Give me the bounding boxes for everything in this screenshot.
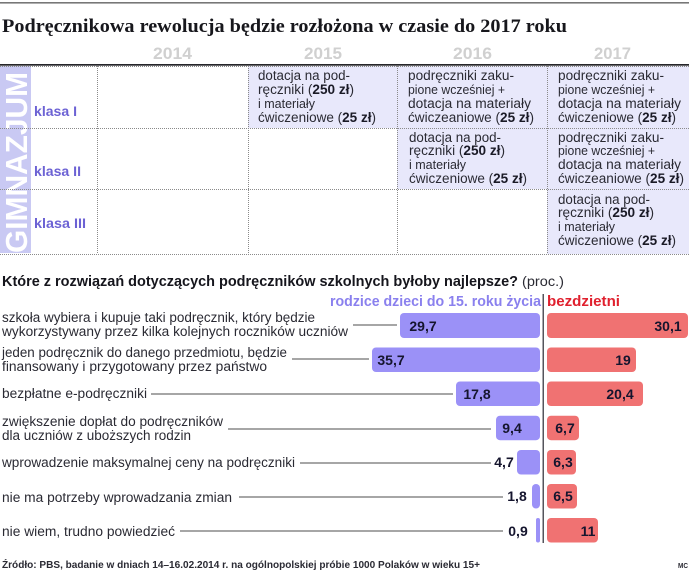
bars: childless: [547, 313, 688, 542]
values: childless: [553, 318, 682, 539]
cell: klasa I 2017: dotacja na materiały: [558, 96, 681, 111]
row labels: [34, 103, 86, 231]
option labels: jeden podręcznik do danego przedmiotu, będzie: [1, 345, 287, 360]
cell: klasa II 2016: dotacja na pod-: [409, 130, 501, 145]
cell: klasa II 2017: podręczniki zaku-: [558, 130, 664, 145]
cell: klasa II 2017: ćwiczeaniowe (25 zł): [558, 171, 684, 186]
cell: klasa I 2016: ćwiczeaniowe (25 zł): [408, 110, 534, 125]
title: Podręcznikowa rewolucja będzie rozłożona w czasie do 2017 roku: [2, 16, 567, 37]
year headers: 2015: [304, 44, 342, 63]
option labels: wprowadzenie maksymalnej ceny na podręczniki: [1, 455, 295, 470]
cell: klasa II 2016: [409, 130, 527, 186]
source note: Źródło: PBS, badanie w dniach 14–16.02.2014 r. na ogólnopolskiej próbie 1000 Polaków w wieku 15+: [2, 558, 480, 571]
values: parents: 9,4: [502, 420, 522, 436]
timetable panel: [0, 64, 689, 254]
year headers: [153, 44, 631, 63]
option labels: wykorzystywany przez kilka kolejnych roczników uczniów: [1, 324, 348, 339]
cell: klasa III 2017: ćwiczeniowe (25 zł): [558, 233, 676, 248]
cell: klasa I 2015: dotacja na pod-: [258, 68, 350, 83]
cell: klasa I 2017: podręczniki zaku-: [558, 68, 664, 83]
cell: klasa I 2016: podręczniki zaku-: [408, 68, 514, 83]
cell: klasa I 2015: ręczniki (250 zł): [258, 82, 354, 97]
option labels: szkoła wybiera i kupuje taki podręcznik, który będzie: [2, 310, 315, 325]
values: parents: 0,9: [508, 523, 528, 539]
cell: klasa I 2015: ćwiczeniowe (25 zł): [258, 110, 376, 125]
cell: klasa II 2017: [558, 130, 684, 186]
values: childless: 11: [581, 523, 596, 539]
option labels: nie wiem, trudno powiedzieć: [2, 524, 175, 539]
values: parents: 4,7: [494, 454, 514, 470]
option labels: finansowany i przygotowany przez państwo: [2, 359, 267, 374]
vertical band: gimnazjum: GIMNAZJUM: [0, 72, 34, 253]
values: childless: 6,7: [555, 420, 575, 436]
values: parents: [377, 318, 528, 539]
option labels: bezpłatne e-podręczniki: [2, 386, 147, 401]
row labels: klasa I: [34, 103, 77, 119]
cell: klasa I 2016: pione wcześniej +: [408, 83, 505, 97]
cell: klasa I 2017: pione wcześniej +: [558, 83, 655, 97]
year headers: 2017: [594, 44, 631, 63]
option labels: dla uczniów z uboższych rodzin: [2, 428, 191, 443]
bars: parents: [372, 313, 540, 542]
cell: klasa I 2016: dotacja na materiały: [408, 96, 531, 111]
values: parents: 29,7: [409, 318, 437, 334]
cell: klasa II 2017: pione wcześniej +: [558, 144, 655, 158]
survey heading: (proc.): [522, 273, 564, 289]
values: childless: 6,3: [553, 454, 573, 470]
author initials: MC: [678, 563, 688, 570]
row labels: klasa III: [34, 215, 86, 231]
row labels: klasa II: [34, 163, 81, 179]
shaded cells: [248, 66, 689, 254]
legend: rodzice dzieci do 15. roku życia: [330, 294, 542, 310]
cell: klasa I 2015: [258, 68, 376, 125]
cell: klasa I 2017: ćwiczeniowe (25 zł): [558, 110, 676, 125]
cell: klasa III 2017: ręczniki (250 zł): [558, 205, 654, 220]
values: parents: 17,8: [463, 386, 491, 402]
cell: klasa II 2016: ćwiczeniowe (25 zł): [409, 171, 527, 186]
cell: klasa III 2017: [558, 192, 676, 248]
option labels: [1, 310, 348, 539]
cell: klasa I 2017: [558, 68, 681, 125]
values: childless: 30,1: [654, 318, 682, 334]
values: parents: 35,7: [377, 352, 405, 368]
cell: klasa II 2016: ręczniki (250 zł): [409, 143, 505, 158]
cell: klasa II 2017: dotacja na materiały: [558, 157, 681, 172]
option labels: zwiększenie dopłat do podręczników: [2, 414, 223, 429]
cell: klasa I 2016: [408, 68, 534, 125]
values: childless: 20,4: [606, 386, 634, 402]
legend: bezdzietni: [547, 294, 620, 310]
year headers: 2016: [453, 44, 492, 63]
values: childless: 19: [615, 352, 631, 368]
cell: klasa II 2016: i materiały: [409, 158, 467, 172]
option labels: nie ma potrzeby wprowadzania zmian: [2, 490, 232, 505]
survey heading: Które z rozwiązań dotyczących podręczników szkolnych byłoby najlepsze?: [2, 274, 518, 290]
year headers: 2014: [153, 44, 193, 63]
cell: klasa III 2017: dotacja na pod-: [558, 192, 650, 207]
values: parents: 1,8: [507, 488, 527, 504]
leader lines: [151, 325, 503, 531]
values: childless: 6,5: [553, 488, 573, 504]
cell: klasa III 2017: i materiały: [558, 220, 616, 234]
cell: klasa I 2015: i materiały: [258, 97, 316, 111]
